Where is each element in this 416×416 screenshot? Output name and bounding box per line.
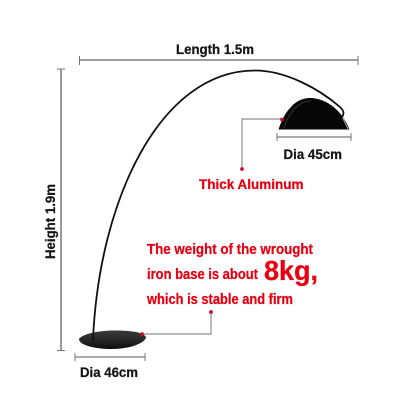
base weight callout: which is stable and firm	[146, 292, 293, 308]
height label: Height 1.9m	[42, 184, 58, 259]
shade diameter dimension	[277, 133, 351, 162]
shade diameter label: Dia 45cm	[284, 146, 342, 162]
lamp base	[79, 330, 146, 349]
lamp illustration	[79, 70, 350, 349]
lamp arc pole	[93, 70, 343, 340]
base leader line	[140, 310, 213, 336]
base diameter dimension	[75, 353, 145, 380]
base weight callout	[146, 242, 318, 308]
base weight callout: iron base is about	[147, 267, 258, 283]
base weight callout: The weight of the wrought	[147, 242, 313, 258]
length label: Length 1.5m	[176, 41, 254, 57]
lamp shade	[278, 98, 350, 130]
height dimension	[42, 69, 65, 350]
aluminum leader line	[240, 118, 284, 171]
length dimension	[79, 41, 358, 65]
aluminum callout: Thick Aluminum	[199, 176, 304, 192]
base diameter label: Dia 46cm	[80, 364, 138, 380]
base weight callout: 8kg,	[264, 255, 318, 286]
